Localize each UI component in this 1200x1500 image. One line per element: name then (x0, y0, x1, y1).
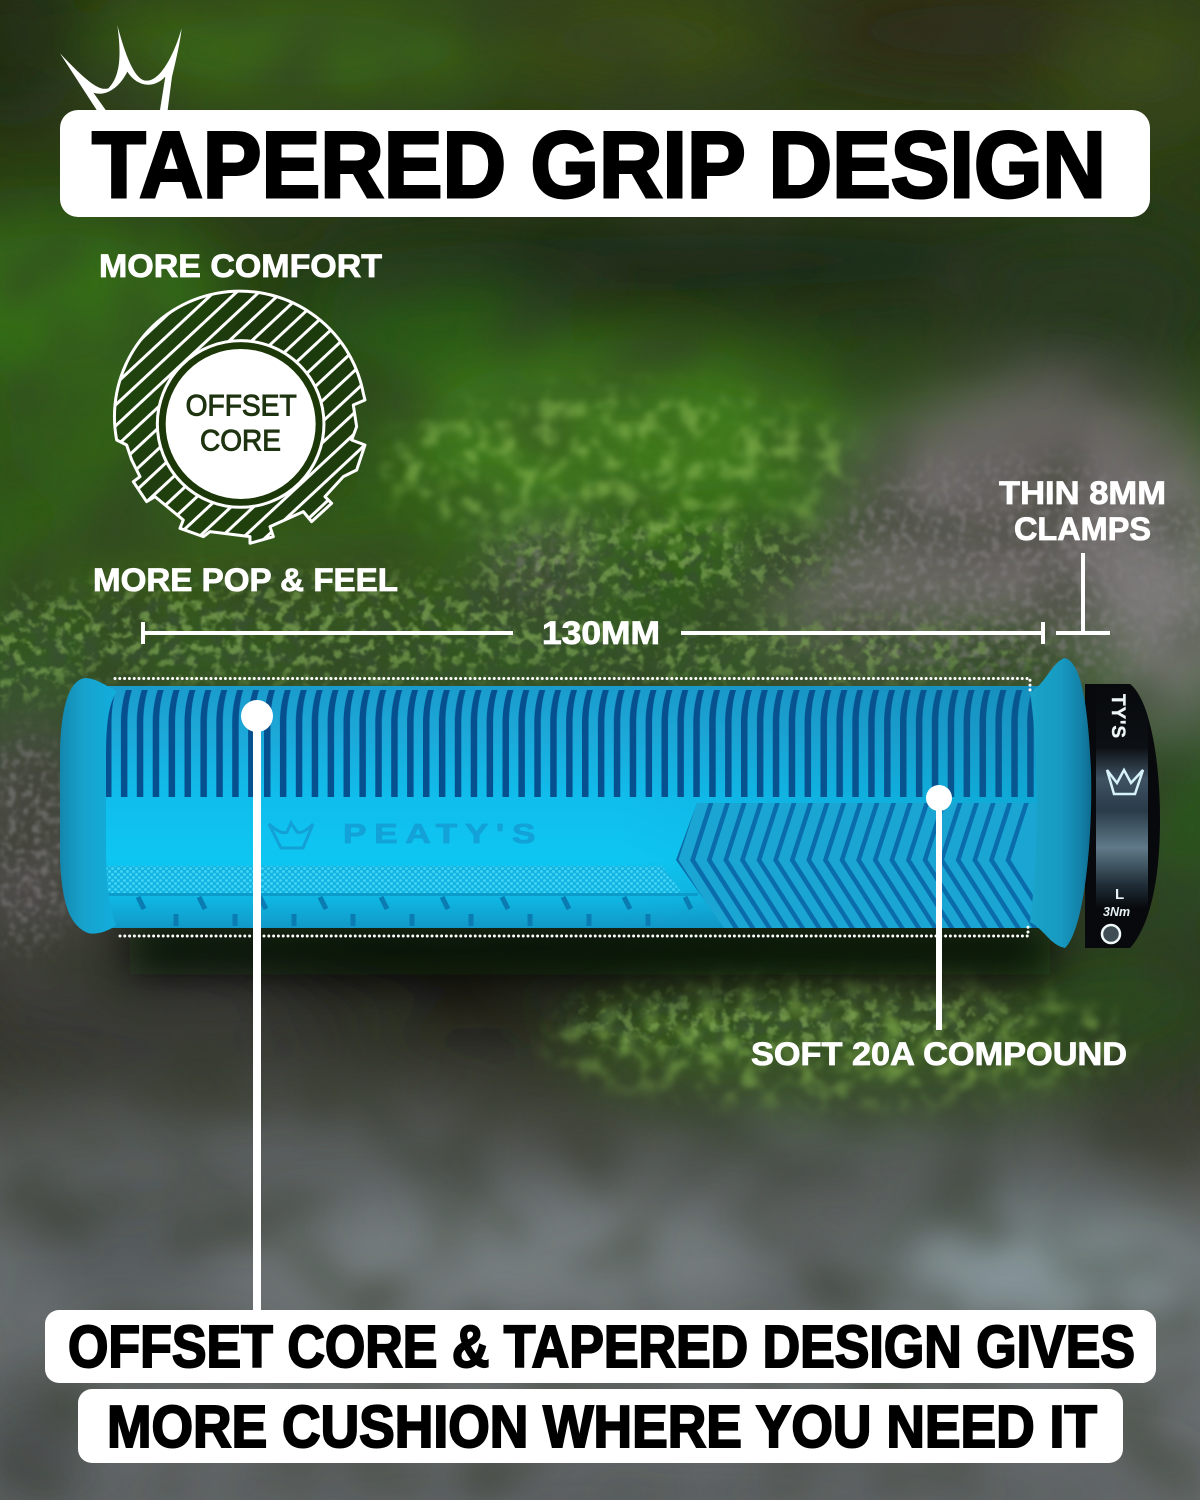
diagram: offset core cross-section (114, 291, 365, 543)
right clamp collar: L (1115, 886, 1124, 903)
label: more pop and feel: MORE POP & FEEL (93, 562, 398, 598)
label: thin 8mm clamps: CLAMPS (1014, 511, 1151, 547)
dimension line: 130mm: 130MM (542, 615, 660, 651)
right clamp collar (1085, 684, 1161, 948)
dotted grip outline (115, 678, 1030, 936)
callout line: offset core (241, 700, 273, 1316)
chevron tread (676, 803, 1038, 928)
lower tread ticks (108, 893, 698, 926)
callout: soft compound: SOFT 20A COMPOUND (751, 1036, 1127, 1072)
shadow under grip (130, 925, 1050, 975)
embossed crown mark (269, 823, 313, 848)
stippled grip band (106, 866, 682, 893)
title banner: TAPERED GRIP DESIGN (92, 112, 1106, 217)
right side shading (100, 686, 1040, 928)
dimension line: clamp width (1056, 553, 1110, 633)
left flange (60, 678, 117, 934)
right clamp collar: TY'S (1107, 694, 1128, 738)
grip body (100, 686, 1040, 928)
bottom banner line two: MORE CUSHION WHERE YOU NEED IT (107, 1394, 1097, 1460)
right flange (1030, 658, 1091, 948)
label: thin 8mm clamps (999, 475, 1166, 547)
diagram: offset core cross-section: CORE (200, 425, 281, 458)
label: thin 8mm clamps: THIN 8MM (999, 475, 1166, 511)
product: blue tapered grip (60, 658, 1161, 948)
dimension line: 130mm (143, 615, 1043, 651)
diagram: offset core cross-section: OFFSET (186, 390, 297, 423)
right clamp collar: 3Nm (1103, 905, 1130, 919)
icon: crown logo (60, 25, 182, 110)
upper ribs (105, 687, 1040, 797)
callout: soft compound (751, 785, 1127, 1072)
embossed brand name: PEATY'S (343, 818, 543, 849)
label: more comfort: MORE COMFORT (99, 248, 382, 284)
